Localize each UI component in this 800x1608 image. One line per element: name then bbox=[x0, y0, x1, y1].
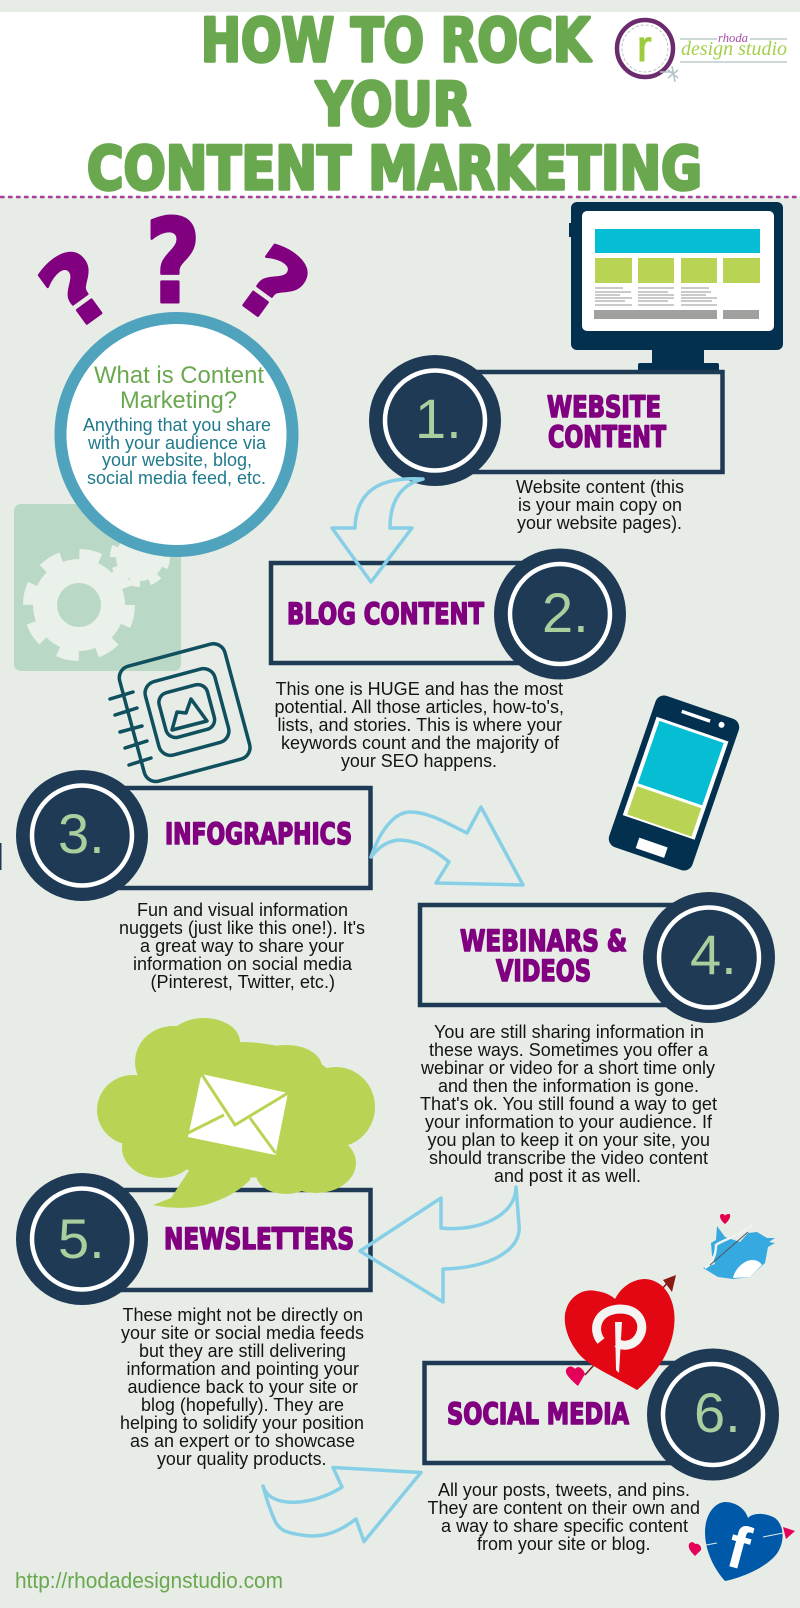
panel: step 6 social media bbox=[424, 1275, 779, 1554]
header band bbox=[0, 12, 800, 197]
heading 2: BLOG CONTENT bbox=[287, 597, 484, 631]
text 5: your quality products. bbox=[157, 1449, 326, 1469]
icon: speech cloud with envelope bbox=[97, 1018, 375, 1208]
text 3: Fun and visual information bbox=[137, 900, 348, 920]
badge 5: 5. bbox=[58, 1207, 105, 1270]
heading 1: CONTENT bbox=[548, 420, 666, 454]
text 5: helping to solidify your position bbox=[120, 1413, 364, 1433]
badge 1: 1. bbox=[415, 387, 462, 450]
title bbox=[87, 6, 702, 204]
heading 6: SOCIAL MEDIA bbox=[447, 1397, 629, 1431]
text 2: This one is HUGE and has the most bbox=[276, 679, 563, 699]
icon: smartphone bbox=[606, 693, 742, 873]
badge 4 bbox=[643, 892, 775, 1023]
text 1: Website content (this bbox=[516, 477, 684, 497]
heading 3: INFOGRAPHICS bbox=[165, 817, 352, 851]
text 4: should transcribe the video content bbox=[429, 1148, 708, 1168]
text 3: information on social media bbox=[133, 954, 353, 974]
text 5: but they are still delivering bbox=[139, 1341, 346, 1361]
text 5: your site or social media feeds bbox=[121, 1323, 364, 1343]
icon: notebook bbox=[110, 641, 253, 784]
text 3: (Pinterest, Twitter, etc.) bbox=[150, 972, 335, 992]
panel: step 2 blog content bbox=[271, 548, 626, 771]
icon: facebook heart: f bbox=[721, 1513, 758, 1583]
text 4: you plan to keep it on your site, you bbox=[428, 1130, 710, 1150]
text 4: and then the information is gone. bbox=[438, 1076, 699, 1096]
text 6: All your posts, tweets, and pins. bbox=[438, 1480, 690, 1500]
circle heading: What is Content bbox=[94, 362, 264, 389]
panel: step 1 website content bbox=[369, 355, 722, 533]
text 4: webinar or video for a short time only bbox=[420, 1058, 715, 1078]
circle text: with your audience via bbox=[87, 433, 267, 453]
text 4: You are still sharing information in bbox=[434, 1022, 704, 1042]
circle heading bbox=[94, 362, 264, 414]
text 4: your information to your audience. If bbox=[425, 1112, 713, 1132]
icon: monitor bbox=[569, 202, 783, 371]
text 5: These might not be directly on bbox=[122, 1305, 363, 1325]
text 2: lists, and stories. This is where your bbox=[278, 715, 562, 735]
heading 1: WEBSITE bbox=[547, 390, 661, 424]
panel: step 4 webinars and videos bbox=[420, 892, 775, 1186]
text 4: these ways. Sometimes you offer a bbox=[429, 1040, 709, 1060]
arrow: step 1 to step 2 bbox=[332, 479, 423, 582]
arrow: step 5 to step 6 bbox=[263, 1468, 421, 1542]
title: HOW TO ROCK bbox=[201, 6, 592, 76]
heading 4: VIDEOS bbox=[496, 954, 591, 988]
text 1 bbox=[516, 477, 684, 533]
icon: twitter bird bbox=[703, 1214, 775, 1279]
badge 2: 2. bbox=[542, 581, 589, 644]
footer url: http://rhodadesignstudio.com bbox=[15, 1568, 283, 1593]
logo: rhoda design studio: design studio bbox=[681, 38, 787, 60]
text 2: your SEO happens. bbox=[341, 751, 497, 771]
text 4: and post it as well. bbox=[494, 1166, 641, 1186]
text 6 bbox=[428, 1480, 700, 1554]
icon: question marks: ? bbox=[21, 228, 134, 353]
badge 6: 6. bbox=[694, 1381, 741, 1444]
badge 6 bbox=[647, 1348, 779, 1480]
text 5: information and pointing your bbox=[126, 1359, 359, 1379]
logo: rhoda design studio bbox=[617, 20, 787, 82]
text 1: your website pages). bbox=[517, 513, 682, 533]
panel: step 5 newsletters box bbox=[16, 1018, 375, 1469]
badge 3: 3. bbox=[58, 802, 105, 865]
badge 1 bbox=[369, 355, 501, 486]
icon: gears panel bbox=[14, 504, 181, 671]
text 5: blog (hopefully). They are bbox=[141, 1395, 344, 1415]
icon: question marks: ? bbox=[216, 224, 329, 349]
title: YOUR bbox=[315, 70, 471, 140]
text 5: as an expert or to showcase bbox=[130, 1431, 355, 1451]
heading 4: WEBINARS & bbox=[460, 924, 627, 958]
badge 5 bbox=[16, 1173, 148, 1305]
logo: rhoda design studio: rhoda bbox=[718, 30, 748, 45]
circle text: Anything that you share bbox=[83, 415, 271, 435]
circle text: your website, blog, bbox=[102, 450, 252, 470]
heading 5: NEWSLETTERS bbox=[164, 1222, 354, 1256]
text 3: a great way to share your bbox=[140, 936, 344, 956]
text 2: keywords count and the majority of bbox=[281, 733, 560, 753]
heading 4 bbox=[460, 924, 627, 988]
icon: question marks: ? bbox=[145, 195, 201, 330]
text 4 bbox=[420, 1022, 717, 1186]
logo: rhoda design studio: r bbox=[637, 22, 652, 71]
panel: step 3 infographics bbox=[16, 770, 370, 992]
arrow: step 4 to step 5 bbox=[360, 1187, 519, 1302]
circle heading: Marketing? bbox=[120, 387, 237, 414]
icon: facebook heart bbox=[689, 1502, 795, 1583]
text 2: potential. All those articles, how-to's, bbox=[274, 697, 564, 717]
panel: what is content marketing bbox=[60, 318, 292, 551]
heading 1 bbox=[547, 390, 666, 454]
circle text: social media feed, etc. bbox=[87, 468, 266, 488]
text 1: is your main copy on bbox=[518, 495, 682, 515]
text 5 bbox=[120, 1305, 364, 1469]
left edge fragment bbox=[0, 843, 2, 870]
text 6: They are content on their own and bbox=[428, 1498, 700, 1518]
badge 4: 4. bbox=[690, 923, 737, 986]
text 3: nuggets (just like this one!). It's bbox=[119, 918, 365, 938]
text 6: a way to share specific content bbox=[441, 1516, 688, 1536]
text 2 bbox=[274, 679, 564, 771]
icon: pinterest heart bbox=[565, 1275, 676, 1390]
text 4: That's ok. You still found a way to get bbox=[420, 1094, 717, 1114]
icon: question marks bbox=[21, 195, 329, 353]
badge 3 bbox=[16, 770, 148, 901]
arrow: step 3 to step 4 bbox=[371, 807, 523, 885]
text 5: audience back to your site or bbox=[128, 1377, 358, 1397]
text 6: from your site or blog. bbox=[477, 1534, 650, 1554]
badge 2 bbox=[494, 548, 626, 680]
circle text bbox=[83, 415, 271, 488]
text 3 bbox=[119, 900, 365, 992]
